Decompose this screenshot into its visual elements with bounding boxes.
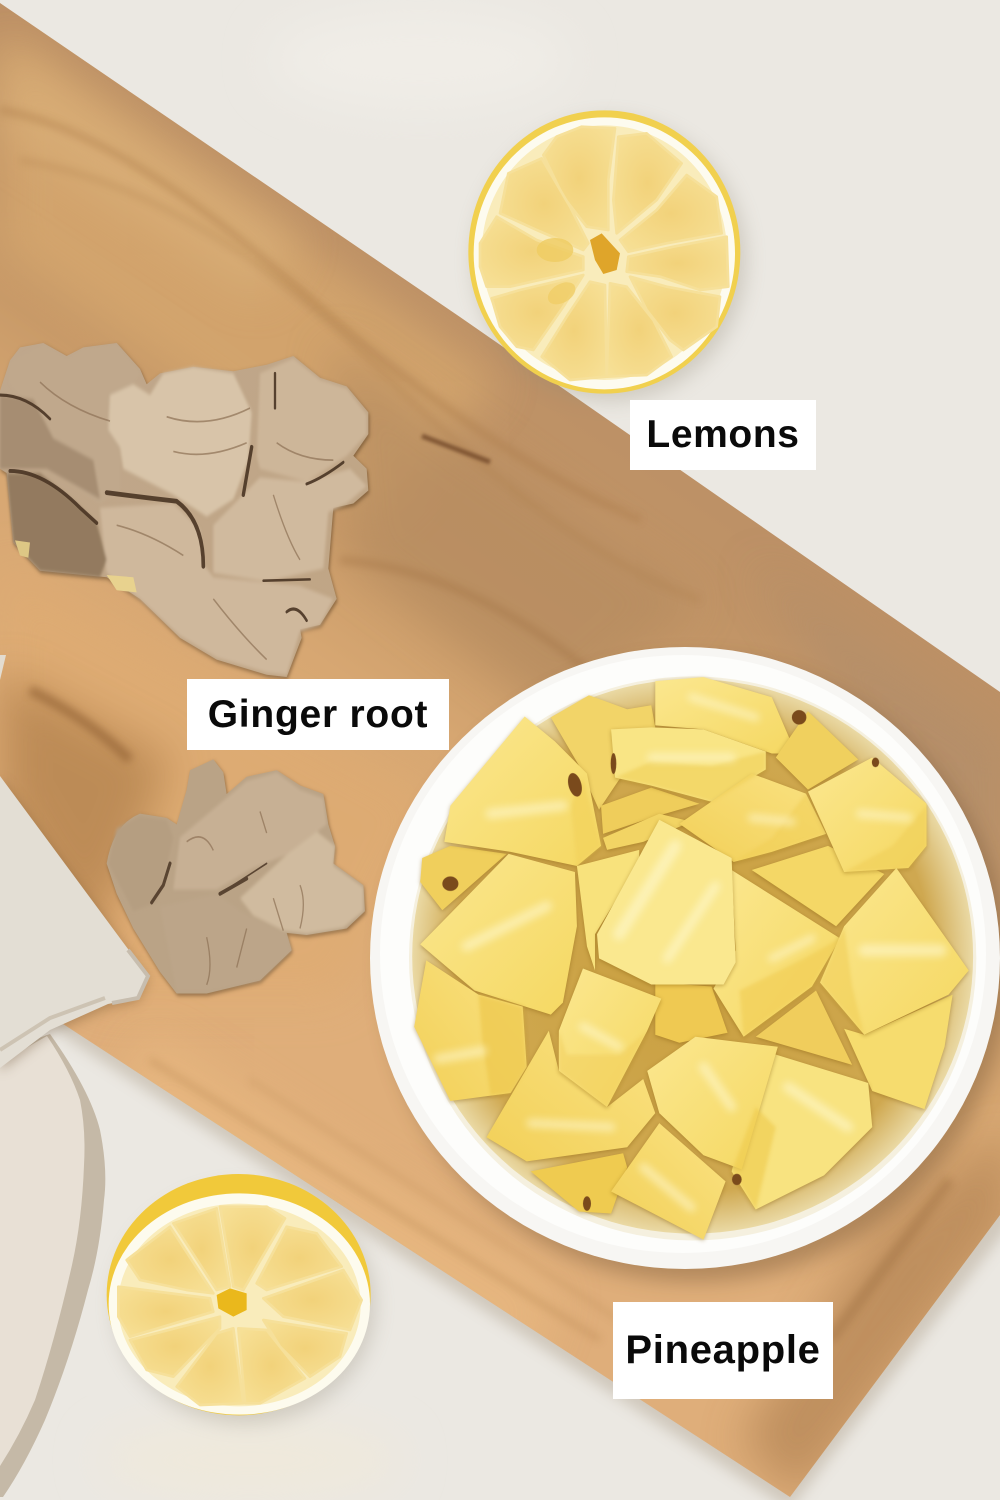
label: Ginger root	[187, 679, 449, 750]
label: Lemons	[630, 400, 816, 470]
lemon: bottom half	[107, 1174, 375, 1423]
label: Ginger root: Ginger root	[208, 692, 428, 736]
label: Lemons: Lemons	[646, 413, 800, 456]
napkin	[0, 655, 148, 1497]
ginger root: small	[107, 759, 365, 994]
pineapple facets and fibres	[438, 697, 941, 1211]
label: Pineapple	[613, 1302, 833, 1399]
bowl	[370, 647, 1000, 1282]
lemon: top half	[468, 110, 746, 401]
label: Pineapple: Pineapple	[625, 1328, 821, 1372]
pineapple chunks	[414, 677, 969, 1240]
ginger root: large	[0, 343, 368, 677]
